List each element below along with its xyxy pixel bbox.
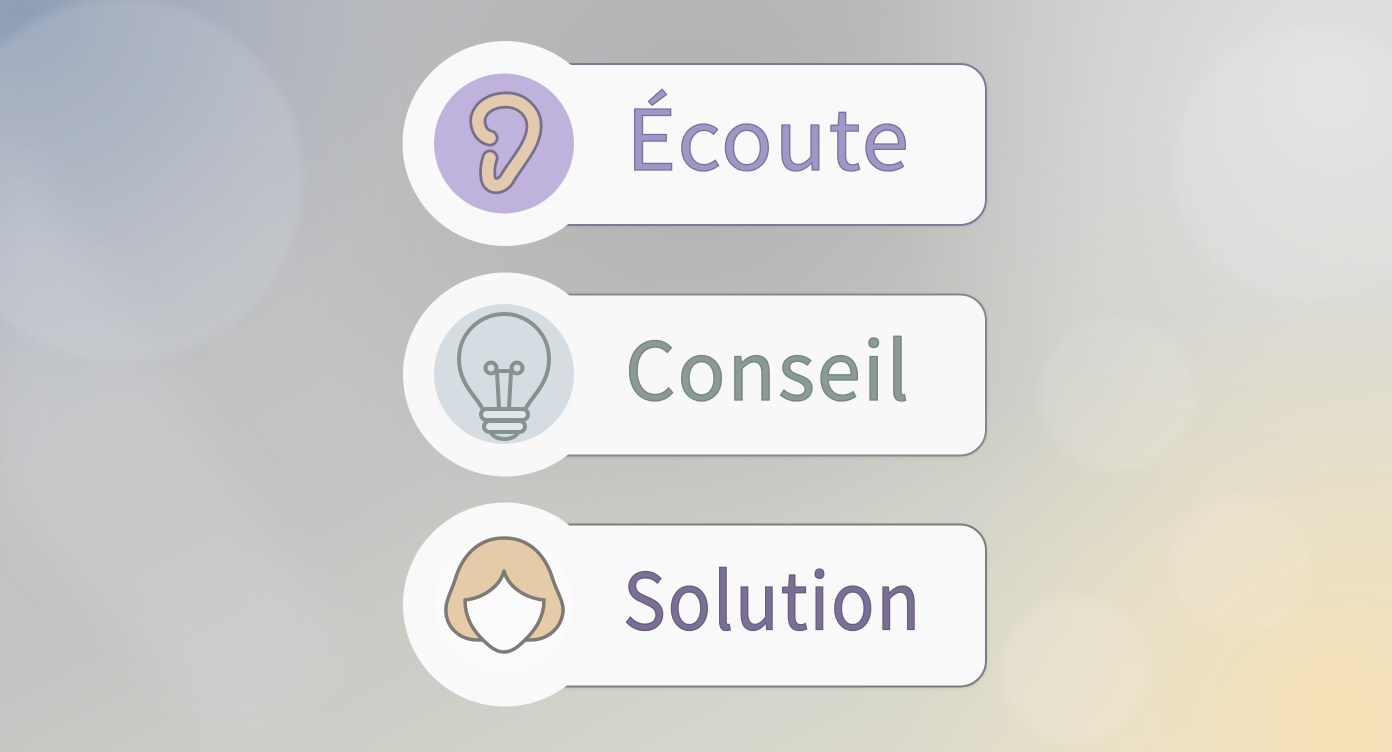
badge: Solution <box>403 502 607 706</box>
label: Solution: Solution <box>623 540 922 652</box>
badge: Conseil <box>403 272 607 476</box>
icon: ear <box>434 74 574 214</box>
label: Conseil: Conseil <box>625 308 911 424</box>
item: Écoute <box>402 41 986 246</box>
icon: person with hair <box>435 535 573 673</box>
card: Solution <box>520 524 986 686</box>
item: Conseil <box>403 272 986 476</box>
badge: Écoute <box>402 41 608 246</box>
label: Écoute: Écoute <box>626 74 911 194</box>
item: Solution <box>403 502 986 706</box>
card: Conseil <box>520 294 986 456</box>
icon: light bulb <box>434 304 574 444</box>
card: Écoute <box>520 64 986 225</box>
